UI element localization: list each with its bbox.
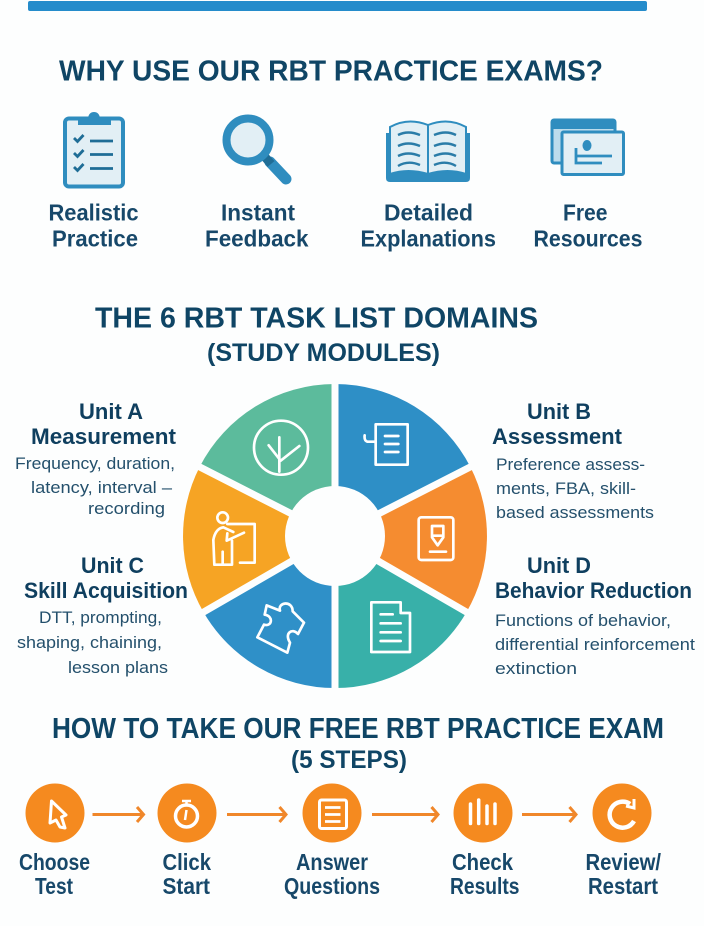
text: unit A xyxy=(15,399,176,518)
icon: tree xyxy=(254,421,308,475)
heading: how to take exam: (5 STEPS) xyxy=(291,746,407,774)
text: unit D: differential reinforcement xyxy=(495,635,695,654)
text: unit C: DTT, prompting, xyxy=(39,608,162,627)
step 5: review restart: Restart xyxy=(588,873,658,899)
label: realistic practice xyxy=(48,200,139,252)
label: free resources xyxy=(534,200,642,252)
text: unit A: latency, interval – xyxy=(31,478,173,497)
step 3: answer questions: Questions xyxy=(284,873,380,899)
wedge: top right blue xyxy=(335,384,470,536)
label: free resources: Free xyxy=(563,200,608,226)
text: unit B xyxy=(492,399,654,522)
heading: task list domains: (STUDY MODULES) xyxy=(207,339,440,367)
text: unit C xyxy=(17,553,188,677)
text: unit D: Functions of behavior, xyxy=(495,611,671,630)
wedge: top left green xyxy=(200,384,335,536)
label: realistic practice: Realistic xyxy=(48,200,139,226)
label: realistic practice: Practice xyxy=(52,226,138,252)
step 4: check results: Results xyxy=(450,873,520,899)
text: unit A: recording xyxy=(88,499,165,518)
icon: document hook xyxy=(365,424,408,465)
label: instant feedback: Instant xyxy=(221,200,295,226)
arrow 1 xyxy=(92,807,144,822)
label: instant feedback: Feedback xyxy=(205,226,309,252)
label: detailed explanations xyxy=(360,200,496,252)
step 4: check results: Check xyxy=(452,849,513,875)
heading: task list domains: THE 6 RBT TASK LIST DOMAINS xyxy=(95,302,538,334)
text: unit D xyxy=(495,553,695,678)
chart: domain wheel xyxy=(183,375,487,697)
wheel centre xyxy=(285,486,385,586)
step 3: answer questions xyxy=(284,784,380,899)
icon: clipboard xyxy=(65,112,123,186)
step 2: click start: Click xyxy=(162,849,211,875)
text: unit A: Measurement xyxy=(31,424,176,449)
label: free resources: Resources xyxy=(534,226,642,252)
text: unit B: Assessment xyxy=(492,424,622,449)
text: unit C: Skill Acquisition xyxy=(24,578,188,603)
step 1: choose test: Test xyxy=(35,873,73,899)
wedge: right orange xyxy=(335,467,487,612)
icons inside the wheel xyxy=(213,421,453,653)
label: detailed explanations: Explanations xyxy=(360,226,496,252)
text: unit D: extinction xyxy=(495,659,577,678)
arrow 4 xyxy=(522,807,576,822)
icon: magnifier xyxy=(226,118,286,179)
step 4: check results xyxy=(450,784,520,899)
step 5: review restart: Review/ xyxy=(586,849,662,875)
wedge: left amber xyxy=(183,467,335,612)
icon: teacher at board xyxy=(213,512,255,565)
step 2: click start xyxy=(158,784,216,899)
text: unit D: Behavior Reduction xyxy=(495,578,692,603)
text: unit B: Unit B xyxy=(527,399,591,424)
icon: resource cards xyxy=(552,120,624,174)
arrow 3 xyxy=(372,807,438,822)
text: unit A: Unit A xyxy=(79,399,143,424)
section: why use our exams xyxy=(48,56,642,252)
top bar xyxy=(28,1,647,11)
step 1: choose test: Choose xyxy=(19,849,90,875)
icon: open book xyxy=(386,121,470,182)
arrow 2 xyxy=(227,807,286,822)
icon: puzzle piece xyxy=(257,603,304,653)
step 5: review restart xyxy=(586,784,662,899)
text: unit D: Unit D xyxy=(527,553,591,578)
heading: why use: WHY USE OUR RBT PRACTICE EXAMS? xyxy=(59,56,603,88)
heading: how to take exam xyxy=(52,713,664,774)
icon: tablet pen xyxy=(419,517,453,560)
wedge: bottom left blue xyxy=(203,536,335,688)
heading: task list domains xyxy=(95,302,538,367)
text: unit B: Preference assess- xyxy=(496,455,645,474)
text: unit C: shaping, chaining, xyxy=(17,633,162,652)
step 3: answer questions: Answer xyxy=(296,849,368,875)
icon: report page xyxy=(371,602,410,652)
label: detailed explanations: Detailed xyxy=(384,200,473,226)
text: unit B: ments, FBA, skill- xyxy=(496,479,636,498)
label: instant feedback xyxy=(205,200,309,252)
step 2: click start: Start xyxy=(162,873,210,899)
text: unit A: Frequency, duration, xyxy=(15,454,175,473)
step 1: choose test xyxy=(19,784,90,899)
text: unit B: based assessments xyxy=(496,503,654,522)
text: unit C: lesson plans xyxy=(68,658,168,677)
wedge: bottom right teal xyxy=(335,536,467,688)
text: unit C: Unit C xyxy=(81,553,144,578)
